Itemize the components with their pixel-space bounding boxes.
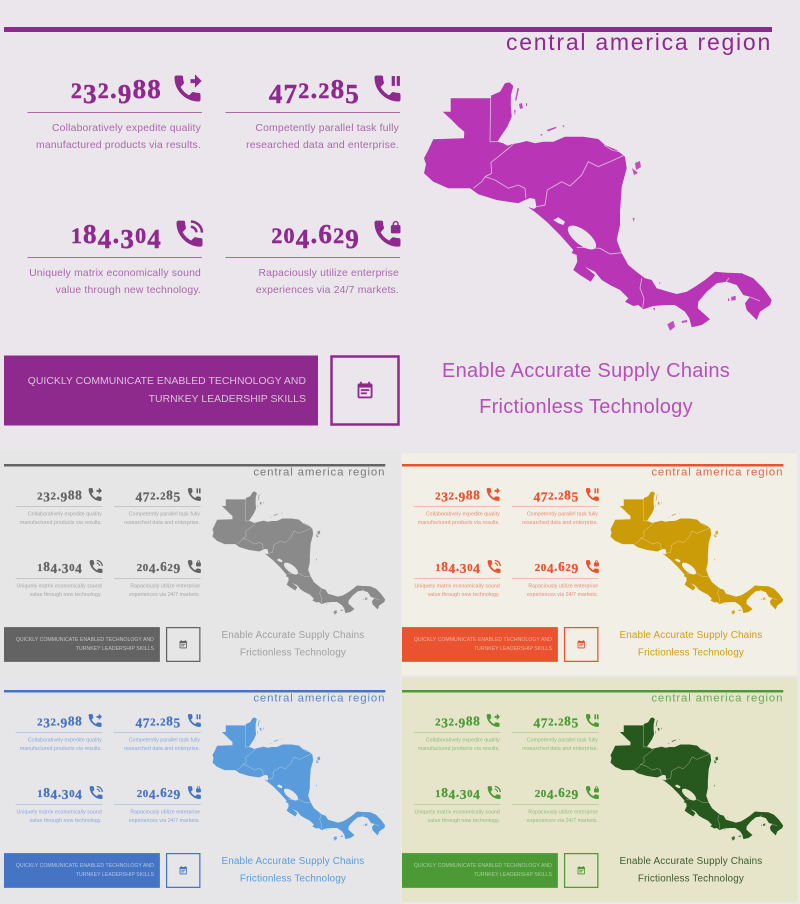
heading <box>222 856 364 885</box>
callout bar: QUICKLY COMMUNICATE ENABLED TECHNOLOGY AND <box>16 863 154 869</box>
callout bar: QUICKLY COMMUNICATE ENABLED TECHNOLOGY AND <box>16 637 154 643</box>
stat: 184.304: 184.304 <box>71 219 162 254</box>
stat: 472.285: 472.285 <box>135 713 181 730</box>
stat: 204.629: 204.629 <box>137 785 181 802</box>
callout bar: TURNKEY LEADERSHIP SKILLS <box>76 646 154 652</box>
stat: 232.988: Collaboratively expedite quality <box>52 123 202 134</box>
callout bar <box>4 853 160 888</box>
stat: 204.629 <box>114 785 201 824</box>
stat: 204.629: 204.629 <box>535 785 579 802</box>
icon: calendar box <box>332 356 398 424</box>
callout bar: TURNKEY LEADERSHIP SKILLS <box>474 872 552 878</box>
stat: 184.304: value through new technology. <box>30 592 102 598</box>
heading: Frictionless Technology <box>240 874 346 885</box>
map: Central America <box>213 717 385 841</box>
title: central america region <box>651 466 783 478</box>
stat: 184.304 <box>16 785 102 824</box>
callout bar: TURNKEY LEADERSHIP SKILLS <box>149 394 306 405</box>
stat: 184.304: 184.304 <box>435 559 480 576</box>
stat: 204.629 <box>114 559 201 598</box>
stat: 184.304: 184.304 <box>37 785 82 802</box>
stat: 232.988: Collaboratively expedite quality <box>426 738 500 744</box>
title: central america region <box>253 692 385 704</box>
callout bar <box>4 356 318 426</box>
stat: 204.629 <box>512 559 599 598</box>
stat: 184.304: value through new technology. <box>428 592 500 598</box>
icon: calendar box <box>565 628 598 661</box>
stat: 232.988 <box>414 487 500 526</box>
stat: 472.285 <box>512 487 599 526</box>
stat: 184.304: Uniquely matrix economically sound <box>16 810 102 816</box>
heading: Enable Accurate Supply Chains <box>222 630 364 641</box>
map: Central America <box>611 491 783 615</box>
stat: 184.304: Uniquely matrix economically sound <box>414 810 500 816</box>
callout bar <box>402 853 558 888</box>
stat: 204.629: 204.629 <box>137 559 181 576</box>
heading: Frictionless Technology <box>638 874 744 885</box>
stat: 232.988 <box>414 713 500 752</box>
title: central america region <box>253 466 385 478</box>
panel: orange variant <box>402 453 797 675</box>
callout bar: QUICKLY COMMUNICATE ENABLED TECHNOLOGY AND <box>414 637 552 643</box>
stat: 204.629: Rapaciously utilize enterprise <box>528 810 598 816</box>
stat: 472.285 <box>114 713 201 752</box>
stat: 472.285: researched data and enterprise. <box>124 520 200 526</box>
icon: calendar box <box>167 628 200 661</box>
stat: 184.304 <box>414 785 500 824</box>
stat: 204.629: Rapaciously utilize enterprise <box>528 584 598 590</box>
heading: Enable Accurate Supply Chains <box>620 856 762 867</box>
callout bar: TURNKEY LEADERSHIP SKILLS <box>76 872 154 878</box>
stat: 232.988: manufactured products via results. <box>418 746 500 752</box>
stat: 184.304: 184.304 <box>435 785 480 802</box>
stat: 472.285: 472.285 <box>269 74 360 108</box>
icon: calendar box <box>565 854 598 887</box>
stat: 472.285: 472.285 <box>533 487 579 504</box>
callout bar: QUICKLY COMMUNICATE ENABLED TECHNOLOGY AND <box>414 863 552 869</box>
heading <box>442 360 730 418</box>
icon: calendar box <box>167 854 200 887</box>
stat: 472.285: Competently parallel task fully <box>527 738 598 744</box>
stat: 472.285: Competently parallel task fully <box>255 123 400 134</box>
stat: 204.629: 204.629 <box>271 219 360 254</box>
stat: 184.304: Uniquely matrix economically sound <box>414 584 500 590</box>
stat: 204.629: experiences via 24/7 markets. <box>256 285 399 296</box>
title bar <box>4 27 772 32</box>
stat: 472.285: 472.285 <box>135 487 181 504</box>
title bar <box>4 690 385 692</box>
stat: 232.988: 232.988 <box>435 713 480 730</box>
panel: blue variant <box>0 680 400 904</box>
title: central america region <box>506 29 772 55</box>
stat: 204.629 <box>512 785 599 824</box>
stat: 472.285 <box>226 74 400 151</box>
stat: 232.988: 232.988 <box>71 74 162 108</box>
stat: 184.304: value through new technology. <box>30 818 102 824</box>
title: central america region <box>651 692 783 704</box>
stat: 204.629: experiences via 24/7 markets. <box>527 592 598 598</box>
stat: 472.285: researched data and enterprise. <box>522 746 598 752</box>
stat: 472.285: researched data and enterprise. <box>246 140 399 151</box>
callout bar: QUICKLY COMMUNICATE ENABLED TECHNOLOGY AND <box>28 376 306 387</box>
callout bar: TURNKEY LEADERSHIP SKILLS <box>474 646 552 652</box>
map: Central America <box>424 82 772 331</box>
stat: 232.988: 232.988 <box>435 487 480 504</box>
stat: 232.988: Collaboratively expedite quality <box>426 512 500 518</box>
stat: 204.629: 204.629 <box>535 559 579 576</box>
stat: 232.988 <box>16 487 102 526</box>
stat: 232.988: Collaboratively expedite quality <box>28 512 102 518</box>
stat: 472.285: researched data and enterprise. <box>522 520 598 526</box>
stat: 184.304 <box>414 559 500 598</box>
callout bar <box>402 627 558 662</box>
title bar <box>402 464 783 466</box>
stat: 204.629: experiences via 24/7 markets. <box>129 592 200 598</box>
stat: 184.304: value through new technology. <box>428 818 500 824</box>
heading <box>620 630 762 659</box>
heading: Enable Accurate Supply Chains <box>222 856 364 867</box>
panel: purple main <box>0 0 800 450</box>
heading: Frictionless Technology <box>240 648 346 659</box>
stat: 204.629 <box>226 219 400 296</box>
map: Central America <box>611 717 783 841</box>
stat: 184.304: Uniquely matrix economically sound <box>16 584 102 590</box>
map: Central America <box>213 491 385 615</box>
heading: Frictionless Technology <box>479 396 693 418</box>
stat: 204.629: experiences via 24/7 markets. <box>527 818 598 824</box>
callout bar <box>4 627 160 662</box>
stat: 472.285 <box>114 487 201 526</box>
stat: 184.304 <box>16 559 102 598</box>
stat: 204.629: Rapaciously utilize enterprise <box>130 810 200 816</box>
panel: grey variant <box>0 450 400 679</box>
stat: 204.629: Rapaciously utilize enterprise <box>258 268 399 279</box>
stat: 232.988: 232.988 <box>37 713 82 730</box>
stat: 184.304: 184.304 <box>37 559 82 576</box>
heading: Enable Accurate Supply Chains <box>620 630 762 641</box>
title bar <box>4 464 385 466</box>
stat: 472.285: 472.285 <box>533 713 579 730</box>
heading <box>620 856 762 885</box>
stat: 472.285 <box>512 713 599 752</box>
stat: 232.988 <box>16 713 102 752</box>
stat: 184.304: Uniquely matrix economically sound <box>29 268 201 279</box>
title bar <box>402 690 783 692</box>
stat: 232.988: manufactured products via results. <box>20 746 102 752</box>
stat: 472.285: Competently parallel task fully <box>129 512 200 518</box>
stat: 472.285: researched data and enterprise. <box>124 746 200 752</box>
stat: 232.988: 232.988 <box>37 487 82 504</box>
heading: Enable Accurate Supply Chains <box>442 360 730 382</box>
stat: 232.988: manufactured products via results. <box>418 520 500 526</box>
panel: green variant <box>402 677 797 902</box>
stat: 232.988: Collaboratively expedite quality <box>28 738 102 744</box>
stat: 232.988: manufactured products via results. <box>20 520 102 526</box>
stat: 184.304: value through new technology. <box>56 285 201 296</box>
stat: 472.285: Competently parallel task fully <box>527 512 598 518</box>
stat: 204.629: experiences via 24/7 markets. <box>129 818 200 824</box>
stat: 232.988: manufactured products via results. <box>36 140 201 151</box>
heading: Frictionless Technology <box>638 648 744 659</box>
stat: 472.285: Competently parallel task fully <box>129 738 200 744</box>
stat: 184.304 <box>28 219 202 296</box>
stat: 204.629: Rapaciously utilize enterprise <box>130 584 200 590</box>
heading <box>222 630 364 659</box>
stat: 232.988 <box>28 74 202 151</box>
